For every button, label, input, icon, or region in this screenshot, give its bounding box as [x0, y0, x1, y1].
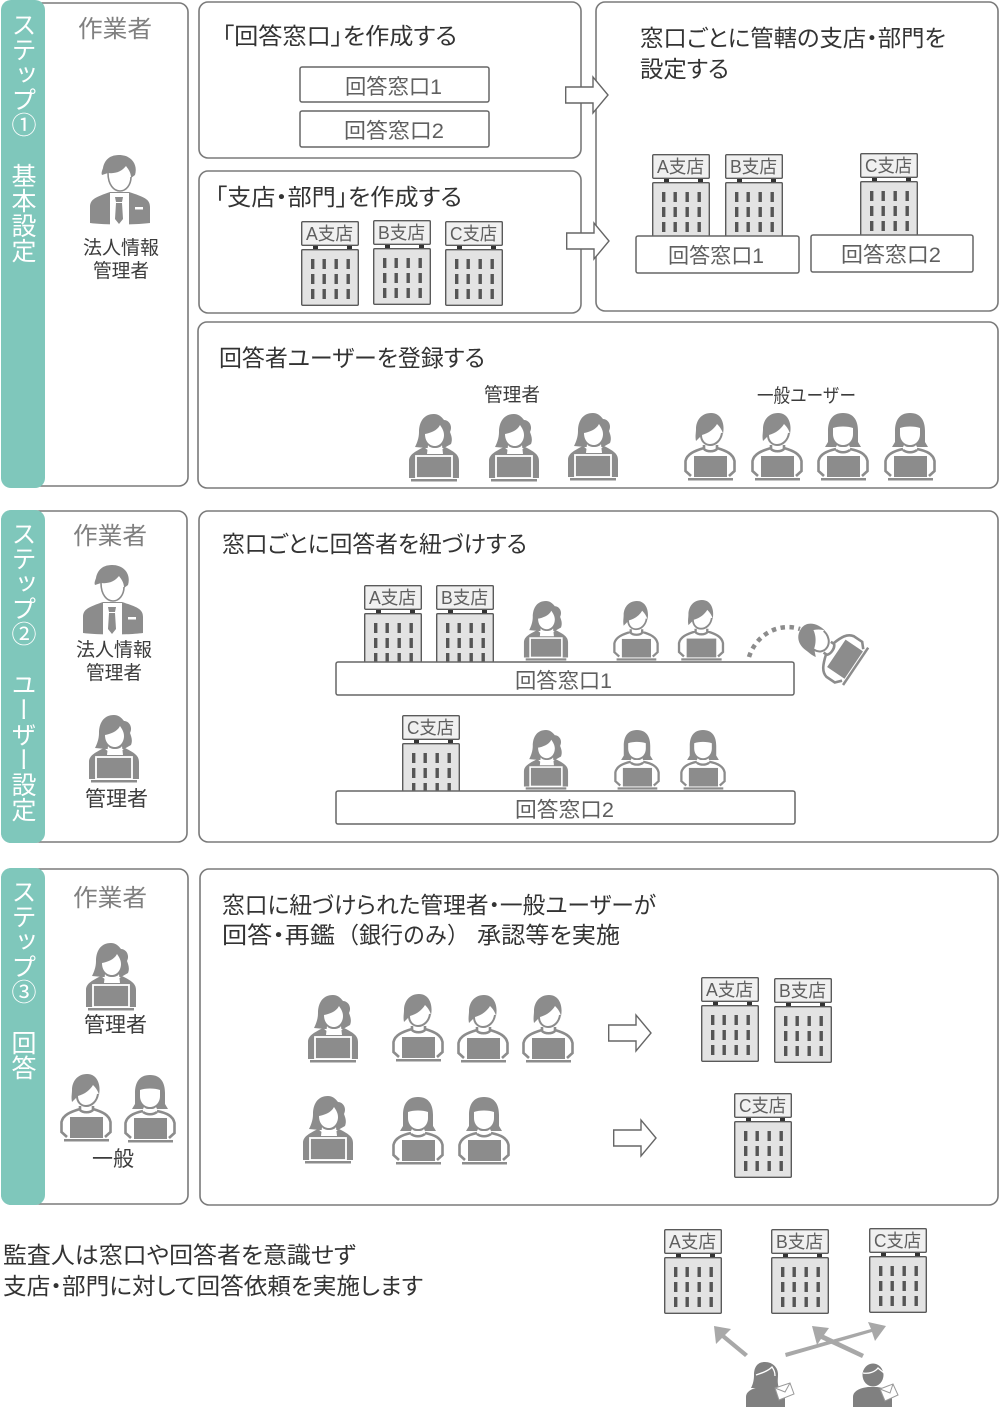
- desk 2 box: [300, 111, 489, 147]
- building C: [861, 154, 917, 237]
- step 2 operator heading: 作業者: [73, 523, 147, 550]
- step 3 vertical label: [8, 879, 36, 1080]
- building C: C支店: [874, 1231, 921, 1251]
- panel: link respondents to desks: [199, 511, 998, 842]
- heading: answer: （銀行のみ）: [337, 922, 469, 948]
- arrow: branches to assignment: [567, 223, 609, 259]
- admin label: 管理者: [84, 1014, 147, 1037]
- desk 1 box: 回答窓口1: [345, 76, 442, 99]
- panel: step 1 operator: [1, 0, 188, 488]
- row 2 people: [303, 1096, 508, 1164]
- building A: [653, 155, 709, 238]
- building C: [446, 222, 502, 305]
- step 2 role label: [76, 639, 152, 684]
- step 1 vertical label: ステップ①: [8, 12, 36, 137]
- arrow: desks to assignment: [566, 77, 608, 113]
- general users: [686, 413, 934, 480]
- icons: general users: [62, 1074, 174, 1142]
- desk 2 bar: 回答窓口2: [515, 799, 614, 822]
- desk 1 bar: 回答窓口1: [515, 670, 612, 693]
- building C: [403, 716, 459, 799]
- panel: step 3 operator: [1, 868, 188, 1205]
- step 1 vertical label: [8, 12, 36, 263]
- building B: B支店: [779, 981, 826, 1001]
- step 1 vertical label: 基本設定: [8, 163, 36, 263]
- building B: B支店: [776, 1232, 823, 1252]
- heading: assign branches: 設定する: [640, 56, 729, 82]
- heading: link respondents: 窓口ごとに回答者を紐づけする: [222, 531, 527, 557]
- step 2 vertical label: ステップ②: [8, 521, 36, 646]
- arrows: auditors to branches: [714, 1322, 886, 1358]
- desk 2 people: [524, 730, 725, 790]
- step 1 band: [1, 0, 45, 488]
- building C: C支店: [865, 156, 912, 176]
- building A: A支店: [369, 588, 416, 608]
- admin users: [409, 413, 618, 482]
- note: auditors: [3, 1242, 423, 1299]
- building A: A支店: [657, 157, 704, 177]
- panel: step 2 operator: [1, 510, 187, 843]
- step 3 vertical label: ステップ③: [8, 879, 36, 1004]
- heading: create branches: 「支店・部門」を作成する: [215, 184, 462, 210]
- icon: corporate admin: [90, 155, 150, 225]
- building B: [772, 1230, 828, 1313]
- building B: B支店: [378, 223, 425, 243]
- step 1 role label: 管理者: [93, 260, 149, 282]
- heading: answer: [222, 892, 656, 948]
- desk 2 bar: [336, 791, 795, 824]
- building C: C支店: [450, 224, 497, 244]
- arrow: row 1: [609, 1015, 651, 1051]
- building C: [735, 1094, 791, 1177]
- step 2 vertical label: ユーザー設定: [8, 672, 36, 822]
- panel: answer: [200, 869, 998, 1205]
- heading: assign branches: [640, 25, 946, 82]
- dotted arc: [749, 627, 800, 657]
- note: auditors: 支店・部門に対して回答依頼を実施します: [3, 1273, 423, 1299]
- arrow: row 2: [614, 1120, 656, 1156]
- step 1 operator heading: 作業者: [78, 16, 152, 43]
- building A: [702, 978, 758, 1061]
- desk 2 box: [811, 235, 973, 272]
- label: general users: 一般ユーザー: [757, 385, 856, 407]
- step 2 role label: 管理者: [86, 662, 142, 684]
- heading: answer: 窓口に紐づけられた管理者・一般ユーザーが: [222, 892, 656, 918]
- icon: male auditor with envelope: [853, 1364, 898, 1407]
- panel: assign branches to desks: [596, 2, 998, 311]
- heading: answer: 回答・再鑑: [222, 922, 335, 948]
- label: admins: 管理者: [484, 384, 540, 406]
- icon: person moving: [787, 609, 870, 688]
- building B: [374, 221, 430, 304]
- panel: create branches: [199, 171, 581, 313]
- step 2 band: [1, 510, 45, 843]
- note: auditors: 監査人は窓口や回答者を意識せず: [3, 1242, 356, 1268]
- building B: [437, 586, 493, 669]
- icon: admin: [86, 943, 136, 1010]
- admin label: 管理者: [85, 788, 148, 811]
- building A: A支店: [706, 980, 753, 1000]
- building A: [302, 222, 358, 305]
- desk 1 box: [636, 236, 799, 273]
- general label: 一般: [92, 1148, 134, 1171]
- icon: corporate admin: [83, 565, 143, 635]
- desk 1 bar: [336, 662, 794, 695]
- icon: admin: [89, 715, 139, 782]
- desk 1 box: [300, 67, 489, 102]
- row 1 people: [308, 994, 572, 1062]
- step 2 vertical label: [8, 521, 36, 822]
- desk 1 people: [524, 600, 723, 661]
- building A: A支店: [669, 1232, 716, 1252]
- heading: assign branches: 窓口ごとに管轄の支店・部門を: [640, 25, 946, 51]
- step 1 role label: 法人情報: [83, 237, 159, 259]
- building C: C支店: [739, 1096, 786, 1116]
- panel: create answer desks: [199, 2, 581, 158]
- building A: [365, 586, 421, 669]
- building A: [665, 1230, 721, 1313]
- step 3 operator heading: 作業者: [73, 885, 147, 912]
- step 3 vertical label: 回答: [8, 1030, 36, 1080]
- step 1 role label: [83, 237, 159, 282]
- building B: [775, 979, 831, 1062]
- heading: answer: 承認等を実施: [477, 922, 620, 948]
- building B: B支店: [730, 157, 777, 177]
- building B: B支店: [441, 588, 488, 608]
- desk 1 box: 回答窓口1: [668, 245, 764, 268]
- desk 2 box: 回答窓口2: [344, 120, 444, 143]
- building A: A支店: [306, 224, 353, 244]
- building C: C支店: [407, 718, 454, 738]
- heading: create desks: 「回答窓口」を作成する: [222, 23, 457, 49]
- building B: [726, 155, 782, 238]
- desk 2 box: 回答窓口2: [841, 244, 941, 267]
- panel: register respondents: [198, 322, 998, 488]
- step 3 band: [1, 868, 45, 1205]
- building C: [870, 1229, 926, 1312]
- heading: register users: 回答者ユーザーを登録する: [219, 345, 485, 371]
- icon: female auditor with envelope: [746, 1362, 794, 1407]
- step 2 role label: 法人情報: [76, 639, 152, 661]
